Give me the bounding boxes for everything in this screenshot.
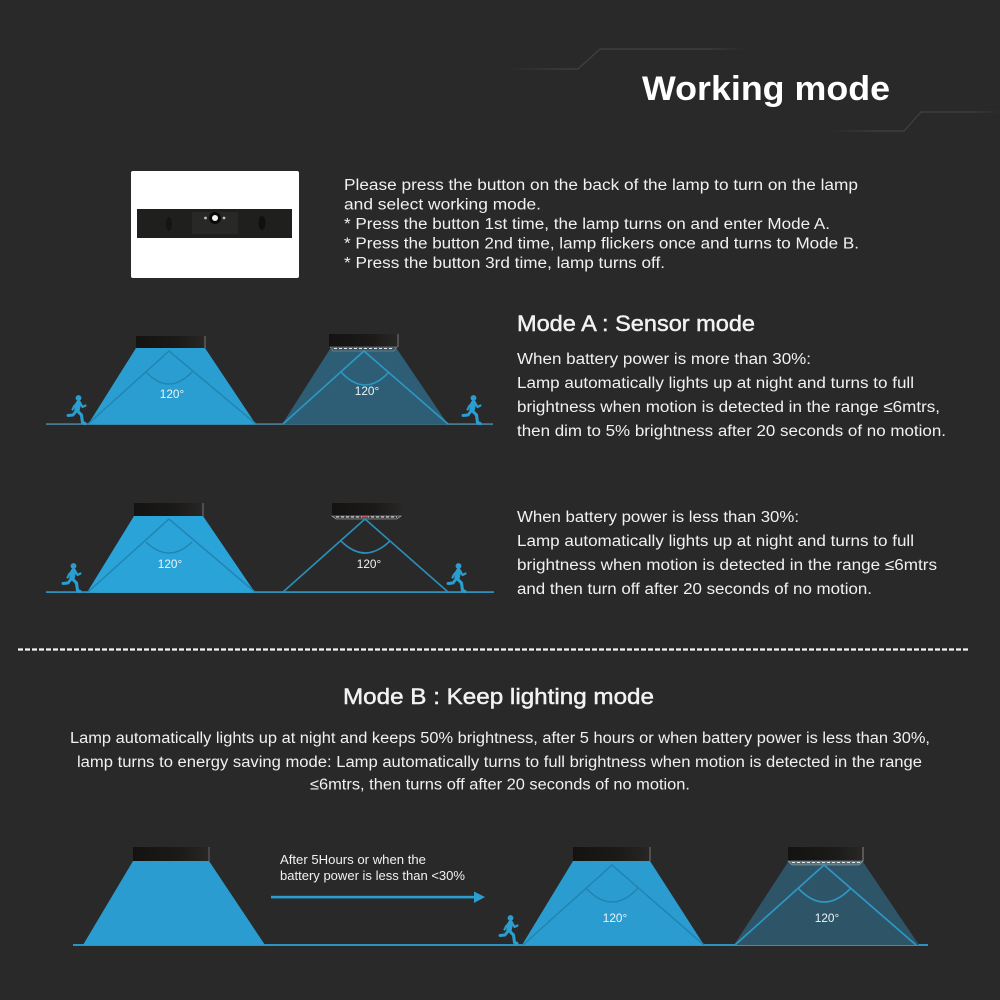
lamp on, light cone bbox=[522, 861, 704, 945]
transition label bbox=[280, 853, 465, 883]
arrow bbox=[271, 892, 485, 903]
instructions text block: and select working mode. bbox=[344, 196, 541, 214]
mode A text: battery above 30%: When battery power is more than 30%: bbox=[517, 351, 811, 368]
instructions text block bbox=[344, 177, 859, 272]
lamp energy saving, dim cone bbox=[734, 862, 919, 945]
lamp on, light cone bbox=[87, 516, 255, 592]
mode A text: battery above 30%: Lamp automatically lights up at night and turns to full bbox=[517, 375, 914, 392]
transition label: After 5Hours or when the bbox=[280, 853, 426, 867]
lamp body bbox=[573, 847, 650, 861]
product photo: back of the lamp bbox=[131, 171, 299, 278]
lamp body with lens bbox=[788, 847, 864, 865]
sensor range lines bbox=[735, 865, 916, 945]
mode B text bbox=[70, 730, 930, 794]
decorative circuit line right bbox=[830, 112, 1000, 131]
instructions text block: Please press the button on the back of the lamp to turn on the lamp bbox=[344, 177, 858, 194]
lamp on, full brightness, light cone bbox=[88, 348, 256, 424]
mode A text: battery above 30%: brightness when motion is detected in the range ≤6mtrs, bbox=[517, 399, 940, 416]
mode A text: battery below 30%: brightness when motion is detected in the range ≤6mtrs bbox=[517, 557, 937, 574]
runner, right bbox=[463, 395, 480, 424]
instructions text block: * Press the button 2nd time, lamp flickers once and turns to Mode B. bbox=[344, 236, 859, 252]
runner, right bbox=[448, 563, 466, 592]
decorative circuit line top bbox=[503, 49, 747, 69]
runner, left bbox=[63, 563, 80, 592]
instructions text block: * Press the button 1st time, the lamp turns on and enter Mode A. bbox=[344, 216, 830, 233]
angle label: 120° bbox=[815, 911, 839, 925]
runner bbox=[500, 915, 518, 944]
mode A text: battery above 30%: then dim to 5% brightness after 20 seconds of no motion. bbox=[517, 423, 946, 440]
diagram: mode B sequence bbox=[73, 847, 928, 946]
lamp off body with lens bbox=[332, 503, 401, 519]
ground line B bbox=[73, 944, 928, 946]
mode B text: Lamp automatically lights up at night and keeps 50% brightness, after 5 hours or when battery power is less than 30%, bbox=[70, 730, 930, 747]
dashed divider bbox=[18, 648, 968, 651]
angle label: 120° bbox=[603, 911, 627, 925]
sensor range lines bbox=[88, 519, 255, 592]
lamp body bbox=[133, 847, 210, 861]
mode B text: ≤6mtrs, then turns off after 20 seconds of no motion. bbox=[310, 776, 690, 794]
lamp body bbox=[134, 503, 204, 516]
runner, left bbox=[68, 395, 86, 424]
sensor range lines bbox=[283, 351, 448, 424]
mode A heading: Mode A : Sensor mode bbox=[517, 311, 755, 336]
lamp dimmed, dim light cone bbox=[282, 349, 448, 424]
angle label: 120° bbox=[160, 387, 184, 401]
mode A text: battery below 30%: and then turn off after 20 seconds of no motion. bbox=[517, 581, 872, 598]
diagram: mode A battery above 30% bbox=[46, 334, 493, 425]
angle label: 120° bbox=[357, 557, 381, 571]
sensor range lines bbox=[523, 865, 704, 945]
mode B heading: Mode B : Keep lighting mode bbox=[343, 684, 654, 709]
mode A text: battery below 30% bbox=[517, 509, 937, 598]
angle label: 120° bbox=[355, 384, 379, 398]
instructions text block: * Press the button 3rd time, lamp turns off. bbox=[344, 255, 665, 272]
diagram: mode A battery below 30% bbox=[46, 503, 494, 593]
ground line A1 bbox=[46, 423, 493, 425]
title: Working mode bbox=[642, 70, 890, 108]
mode A text: battery above 30% bbox=[517, 351, 946, 440]
mode B text: lamp turns to energy saving mode: Lamp automatically turns to full brightness when motion is detected in the range bbox=[77, 754, 922, 771]
angle label: 120° bbox=[158, 557, 182, 571]
mode A text: battery below 30%: Lamp automatically lights up at night and turns to full bbox=[517, 533, 914, 550]
lamp at 50%, light cone bbox=[83, 861, 265, 945]
transition label: battery power is less than <30% bbox=[280, 869, 465, 883]
ground line A2 bbox=[46, 591, 494, 593]
sensor range lines, no light bbox=[283, 519, 448, 592]
lamp body bbox=[136, 336, 206, 348]
mode A text: battery below 30%: When battery power is less than 30%: bbox=[517, 509, 799, 526]
lamp body with lens bbox=[329, 334, 398, 351]
sensor range lines bbox=[88, 351, 256, 424]
